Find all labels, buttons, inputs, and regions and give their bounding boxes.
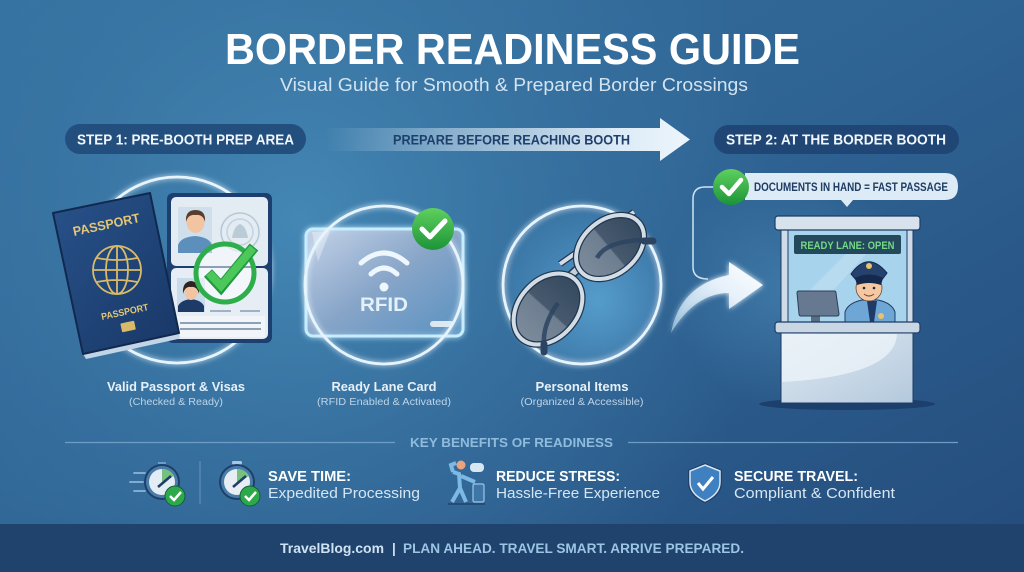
- check badge: [412, 208, 454, 250]
- connector lines: [272, 283, 503, 285]
- benefit: save time: SAVE TIME:: [268, 469, 351, 485]
- connector to callout: [693, 187, 714, 279]
- passport booklet: [53, 193, 180, 359]
- ring: [84, 177, 270, 363]
- benefit: secure travel: [688, 463, 895, 503]
- callout: documents in hand: [713, 169, 958, 207]
- icon: stopwatch: [219, 461, 260, 506]
- item: personal items: [500, 202, 661, 408]
- ready lane sign: [794, 235, 901, 254]
- passport booklet: PASSPORT: [100, 302, 150, 323]
- footer band: TravelBlog.com: [280, 541, 384, 556]
- benefit: reduce stress: REDUCE STRESS:: [496, 469, 620, 485]
- benefit: secure travel: Compliant & Confident: [734, 486, 895, 502]
- border booth: [759, 216, 935, 410]
- ring: [305, 206, 463, 364]
- booth shadow: [759, 398, 935, 410]
- item: ready lane card: [305, 206, 463, 408]
- label: [107, 380, 245, 408]
- benefit: reduce stress: Hassle-Free Experience: [496, 486, 660, 502]
- benefits heading: KEY BENEFITS OF READINESS: [410, 435, 613, 450]
- arrow: prepare before reaching booth: [325, 118, 690, 161]
- label: Personal Items: [536, 380, 629, 394]
- open visa document: [167, 193, 272, 343]
- title: BORDER READINESS GUIDE: [225, 25, 800, 74]
- label: (RFID Enabled & Activated): [317, 396, 451, 408]
- label: [520, 380, 644, 408]
- step 2 pill: STEP 2: AT THE BORDER BOOTH: [726, 132, 946, 148]
- benefit: reduce stress: [448, 460, 660, 504]
- label: Ready Lane Card: [332, 380, 436, 394]
- RFID card: RFID: [360, 295, 408, 316]
- subtitle: Visual Guide for Smooth & Prepared Border Crossings: [280, 75, 748, 95]
- step 1 pill: [65, 124, 306, 154]
- icon: shield: [688, 463, 722, 503]
- label: (Checked & Ready): [129, 396, 223, 408]
- booth posts: [781, 230, 913, 322]
- arrow: prepare before reaching booth: PREPARE BEFORE REACHING BOOTH: [393, 132, 630, 148]
- footer band: [0, 524, 1024, 572]
- ready lane sign: READY LANE: OPEN: [800, 240, 895, 252]
- step 1 pill: STEP 1: PRE-BOOTH PREP AREA: [77, 132, 294, 148]
- check badge: [196, 244, 254, 302]
- benefit: save time: [219, 461, 420, 506]
- benefit: secure travel: SECURE TRAVEL:: [734, 469, 858, 485]
- ring: [503, 206, 661, 364]
- icon: sunglasses: [500, 202, 656, 358]
- label: Valid Passport & Visas: [107, 380, 245, 394]
- label: [317, 380, 451, 408]
- booth window: [788, 230, 907, 322]
- booth base: [781, 333, 913, 403]
- counter: [775, 322, 920, 333]
- booth roof: [775, 216, 920, 230]
- step 2 pill: [714, 125, 959, 154]
- border officer: [845, 262, 895, 322]
- curved arrow to booth: [671, 262, 763, 333]
- callout: documents in hand: DOCUMENTS IN HAND = FAST PASSAGE: [754, 182, 948, 194]
- label: (Organized & Accessible): [520, 396, 644, 408]
- item: passport and visas: [53, 177, 272, 408]
- footer band: |: [392, 541, 396, 556]
- icon: traveller with suitcase: [448, 460, 485, 504]
- computer monitor: [797, 291, 839, 322]
- benefit icon: fast timer: [130, 462, 185, 506]
- footer band: PLAN AHEAD. TRAVEL SMART. ARRIVE PREPARED.: [403, 541, 744, 556]
- passport booklet: PASSPORT: [72, 210, 141, 239]
- RFID card: [306, 229, 463, 336]
- benefit: save time: Expedited Processing: [268, 486, 420, 502]
